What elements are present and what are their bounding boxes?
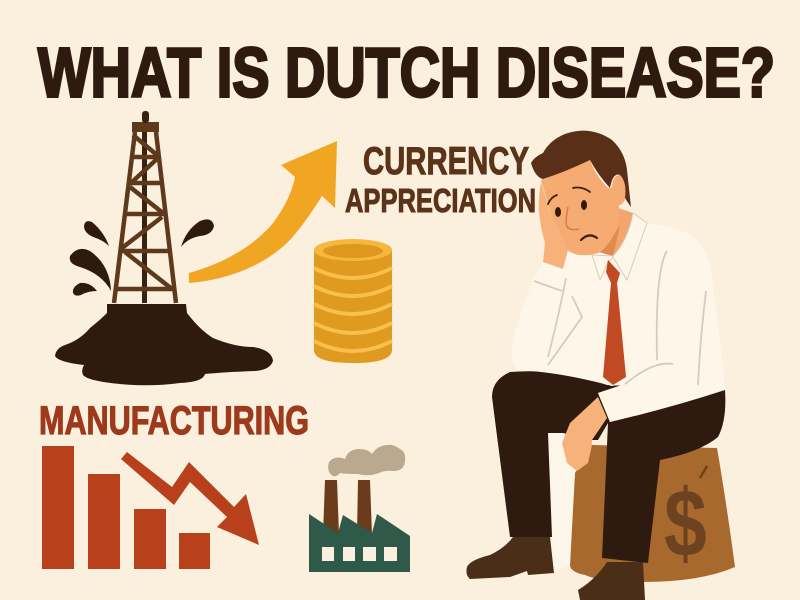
building [309, 514, 410, 572]
arrow: falling trend [121, 452, 259, 545]
icon: oil derrick with oil spill [55, 111, 273, 385]
necktie [603, 260, 626, 385]
right shoe [578, 562, 645, 600]
hanging hand [562, 397, 607, 471]
hair [531, 131, 631, 207]
derrick [114, 130, 176, 303]
face [541, 160, 619, 255]
arrow: currency rising [189, 141, 337, 283]
shirt cuff [598, 384, 640, 422]
chimneys [323, 480, 339, 535]
bar chart: manufacturing decline [42, 446, 210, 569]
facial features [548, 188, 597, 240]
oil droplets [70, 219, 214, 296]
gap between legs [548, 433, 575, 572]
left shoe [466, 537, 554, 579]
hand on cheek [539, 182, 568, 269]
heading: currency appreciation [345, 140, 536, 219]
heading: currency appreciation: CURRENCY [363, 140, 529, 183]
neck [598, 208, 633, 256]
shirt folds [534, 251, 706, 393]
figure: worried businessman on money bag [466, 131, 735, 600]
heading: manufacturing: MANUFACTURING [39, 399, 309, 443]
collar [592, 213, 647, 280]
dollar sign: $ [664, 470, 707, 577]
windows [322, 547, 397, 561]
icon: coin stack [314, 239, 392, 363]
smoke [328, 445, 405, 476]
money sack [570, 445, 735, 582]
icon: factory [309, 445, 410, 572]
ear [612, 175, 626, 205]
heading: currency appreciation: APPRECIATION [345, 182, 536, 219]
oil spill [55, 304, 273, 385]
shirt [511, 213, 725, 422]
trousers [492, 371, 725, 563]
